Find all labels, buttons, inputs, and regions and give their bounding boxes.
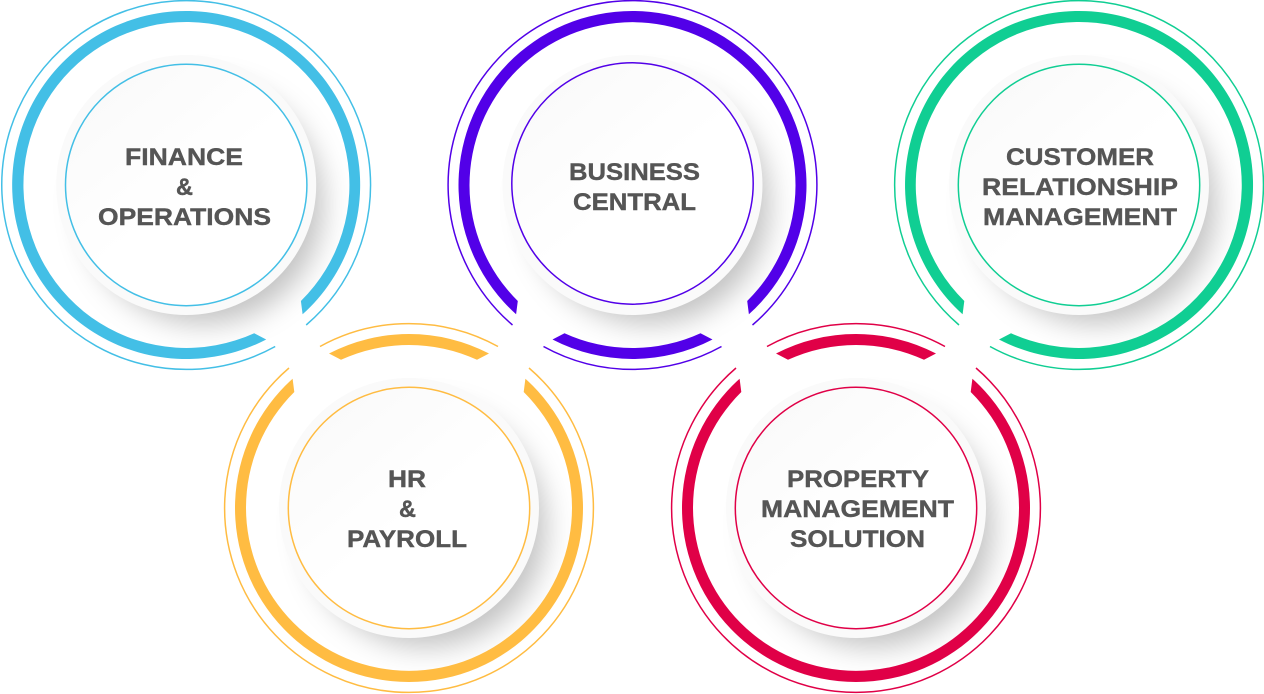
label: business central: CENTRAL <box>573 189 696 216</box>
label: hr payroll: & <box>399 496 416 523</box>
label: customer relationship management <box>982 144 1178 231</box>
ring: property management solution <box>672 324 1040 692</box>
label: property management solution: MANAGEMENT <box>761 496 954 523</box>
label: finance: FINANCE <box>125 144 243 171</box>
disc: finance <box>56 55 323 324</box>
disc: business central <box>502 55 770 324</box>
label: business central <box>569 159 700 216</box>
label: hr payroll <box>347 466 467 553</box>
panel: Business Central <box>448 1 817 369</box>
label: finance: OPERATIONS <box>98 204 271 231</box>
panel: Finance & Operations <box>2 1 371 369</box>
label: business central: BUSINESS <box>569 159 700 186</box>
disc: customer relationship management <box>949 55 1216 324</box>
panel: HR & Payroll <box>225 324 593 692</box>
ring: business central <box>448 1 817 369</box>
label: hr payroll: PAYROLL <box>347 526 467 553</box>
label: finance: & <box>176 174 193 201</box>
label: customer relationship management: CUSTOMER <box>1006 144 1154 171</box>
label: customer relationship management: RELATIONSHIP <box>982 174 1178 201</box>
label: hr payroll: HR <box>388 466 426 493</box>
panel: Customer Relationship Management <box>895 1 1263 369</box>
label: property management solution <box>761 466 954 553</box>
ring: hr payroll <box>225 324 593 692</box>
label: property management solution: PROPERTY <box>787 466 929 493</box>
disc: property management solution <box>726 378 993 647</box>
disc: hr payroll <box>279 378 546 647</box>
label: finance <box>98 144 271 231</box>
ring: finance <box>2 1 371 369</box>
ring: customer relationship management <box>895 1 1263 369</box>
label: customer relationship management: MANAGEMENT <box>983 204 1177 231</box>
label: property management solution: SOLUTION <box>790 526 925 553</box>
panel: Property Management Solution <box>672 324 1040 692</box>
